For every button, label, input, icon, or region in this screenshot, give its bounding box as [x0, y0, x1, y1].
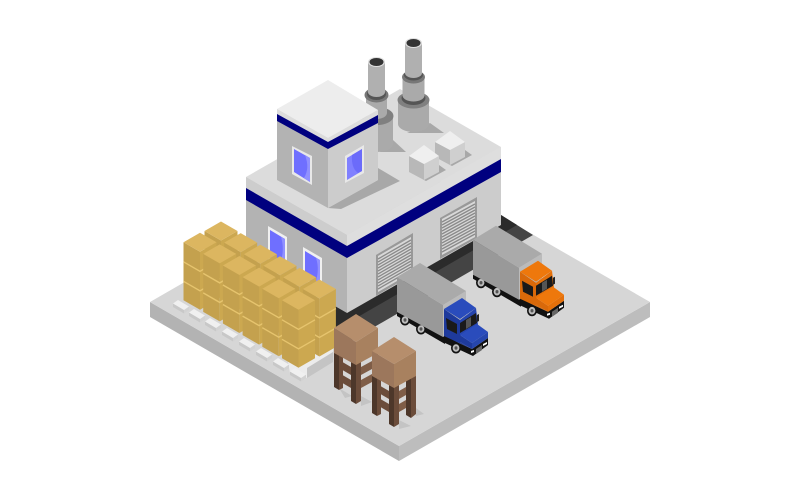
truck orange	[473, 226, 564, 319]
right wall	[347, 147, 501, 313]
cab	[444, 298, 488, 354]
lower left window	[268, 226, 287, 270]
left wall	[246, 177, 347, 313]
roof box front	[409, 145, 446, 181]
ground platform	[150, 158, 650, 461]
loading dock strip	[333, 215, 533, 344]
water tank rear	[334, 314, 378, 406]
chimney right	[398, 38, 444, 133]
blue band	[246, 159, 501, 258]
lower right window	[303, 247, 322, 290]
roof	[246, 89, 501, 235]
orange cab	[520, 261, 564, 317]
water tank front	[372, 337, 424, 429]
roof fascia	[246, 177, 347, 247]
pallet base	[173, 300, 333, 382]
rooftop tower	[277, 80, 400, 209]
truck blue	[397, 263, 488, 356]
stacked cardboard boxes	[184, 222, 336, 368]
tower window left	[292, 146, 312, 185]
roller door 2	[440, 197, 477, 259]
tower window right	[345, 145, 364, 183]
roller door 1	[376, 233, 413, 296]
chimney left	[360, 57, 406, 152]
roof box rear	[435, 131, 472, 166]
factory building	[246, 89, 501, 313]
